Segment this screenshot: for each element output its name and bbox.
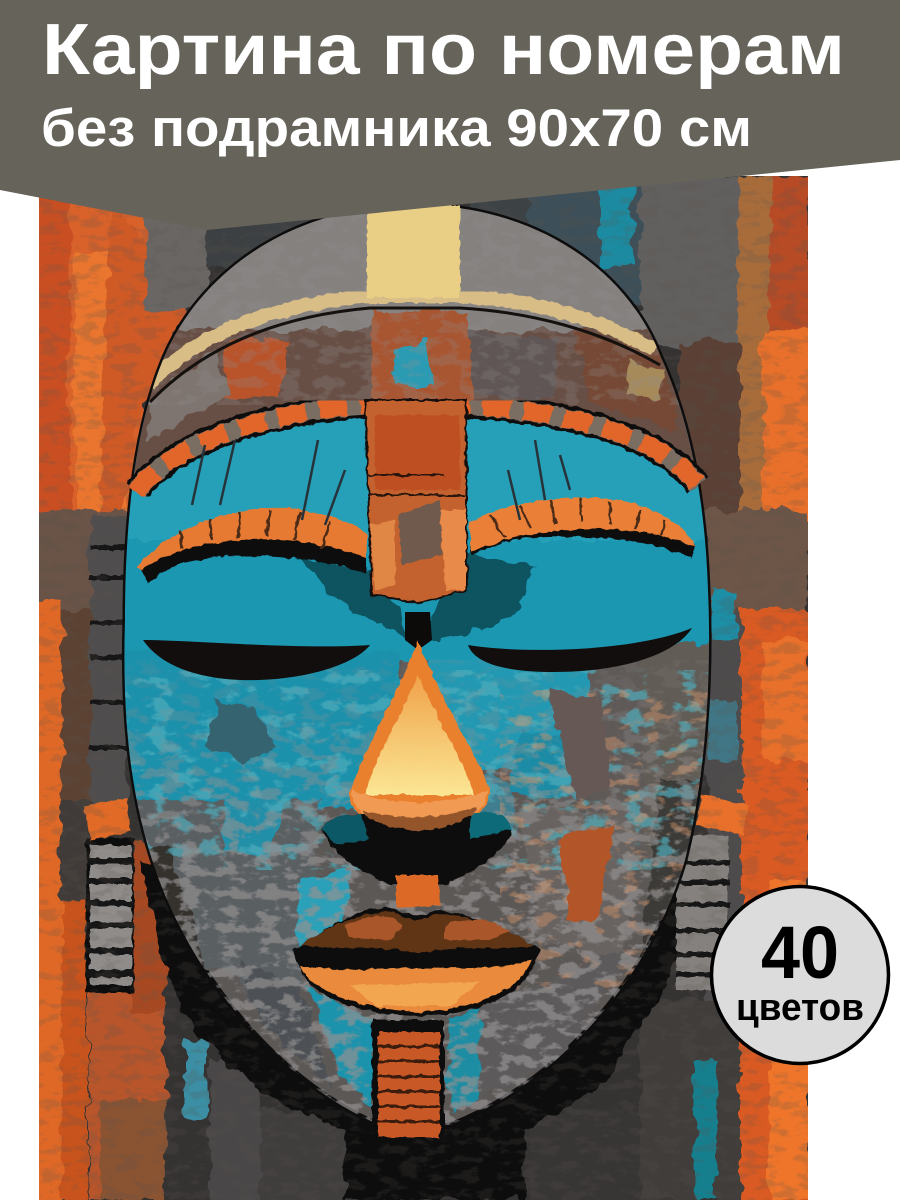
lower face teal, gray and rust mottling [125,660,715,1130]
yellow arc band [148,296,655,385]
mask head [110,200,720,1137]
nose [350,640,490,835]
striped headband [136,405,698,492]
forehead stripe [367,205,460,298]
left beam bands [90,545,130,750]
right eyebrow [469,498,696,558]
upper paint texture [148,234,679,405]
cheek patches [210,690,615,925]
eye lids shadow [405,612,432,650]
background paint texture [39,176,808,1200]
subtitle: без подрамника 90х70 см [41,99,752,158]
eyelid shadow [295,555,535,640]
jaw shadow [140,860,705,1200]
title: Картина по номерам [42,10,845,90]
painting background [30,170,820,1200]
painting: African mask [30,170,820,1200]
left eyebrow [138,508,368,584]
nostrils [322,813,512,885]
nose bridge block [365,400,467,603]
chin stripe [372,1020,444,1137]
lips [293,908,541,1016]
face colour areas [110,200,720,1115]
philtrum [396,875,440,908]
brow band [134,306,694,475]
right earring [676,795,748,990]
forehead cracks [192,440,570,525]
left closed eye [143,640,370,680]
title banner [0,0,900,230]
side ornaments [84,545,748,993]
badge number: 40 [761,911,839,994]
right closed eye [468,628,692,672]
left earring [84,798,134,993]
badge: 40 colours [712,886,888,1064]
badge label: цветов [736,987,864,1029]
